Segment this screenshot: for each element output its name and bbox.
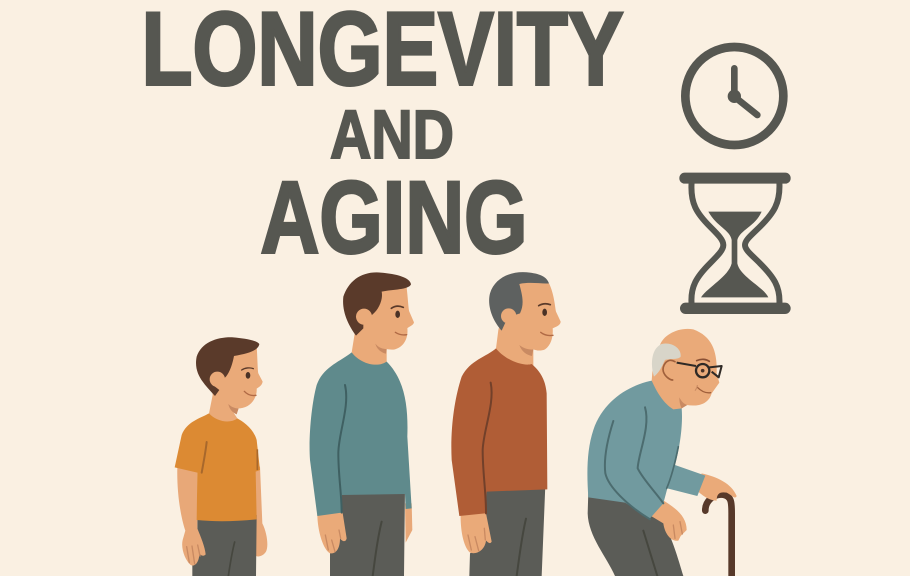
trousers	[588, 492, 683, 576]
icon: clock	[685, 47, 783, 145]
t-shirt	[175, 413, 260, 521]
head	[652, 329, 719, 417]
head	[343, 272, 414, 375]
far arm	[255, 467, 267, 556]
face details	[697, 359, 709, 361]
icon: hourglass	[679, 173, 791, 314]
trousers	[469, 485, 545, 576]
title	[142, 0, 624, 274]
title line: AND: AND	[330, 96, 454, 173]
title line: AGING: AGING	[260, 160, 528, 274]
sweater	[310, 352, 412, 516]
far hand	[405, 503, 412, 543]
ear	[663, 360, 675, 380]
white hair	[652, 344, 681, 377]
body	[310, 352, 412, 576]
hand on cane	[695, 473, 737, 501]
near arm and hand	[177, 467, 206, 566]
hair	[196, 337, 259, 396]
ear	[210, 372, 225, 387]
near hand	[647, 498, 687, 541]
figure: child in orange t-shirt	[175, 337, 267, 576]
hand	[461, 508, 492, 553]
chin shadow	[228, 404, 239, 414]
cane	[705, 495, 732, 576]
figure: elderly man with glasses and cane	[587, 329, 737, 576]
figure: older man in rust sweater	[451, 272, 561, 576]
neck and head	[496, 280, 561, 375]
glasses	[677, 363, 722, 377]
neck and head	[209, 345, 263, 432]
face details	[539, 304, 550, 306]
sweater	[451, 348, 547, 516]
figure: young man in teal sweater	[310, 272, 414, 576]
chin shadow	[519, 345, 533, 356]
sweater	[587, 381, 705, 518]
trousers	[330, 488, 405, 576]
near hand	[317, 507, 347, 553]
ear	[501, 308, 516, 324]
trousers	[192, 515, 257, 576]
grey hair	[489, 272, 549, 331]
face details	[242, 368, 253, 370]
